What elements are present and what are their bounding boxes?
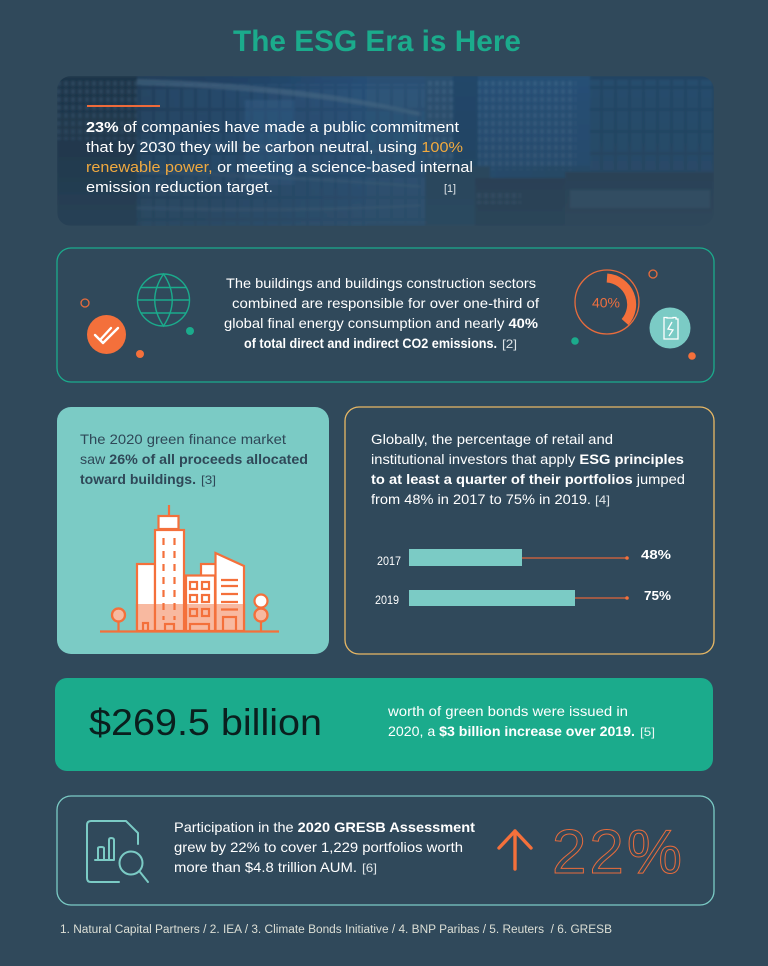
text block: commitment statement: renewable power, or meeting a science-based internal (86, 159, 473, 176)
panel: GRESB assessment (57, 796, 714, 905)
text block: investors statement: Globally, the percentage of retail and (371, 431, 613, 447)
text block: investors statement: [4] (595, 493, 610, 507)
bar: 2019: 2019 (375, 595, 399, 607)
text block: energy statement: of total direct and indirect CO2 emissions. (244, 335, 497, 351)
text block: GRESB statement: Participation in the 2020 GRESB Assessment (174, 819, 475, 835)
title: The ESG Era is Here (233, 25, 521, 58)
lower tint band (110, 604, 269, 630)
big number: $269.5 billion (89, 702, 322, 743)
text block: bonds statement (387, 703, 655, 739)
panel: ESG investors (345, 407, 714, 654)
text block: proceeds statement: toward buildings. (80, 471, 196, 487)
panel: green finance market (57, 407, 329, 654)
text block: investors statement (371, 431, 685, 507)
icon: battery (650, 308, 690, 348)
decorative dots left (81, 299, 194, 358)
text block: commitment statement: emission reduction target. (86, 179, 273, 196)
text block: bonds statement: 2020, a $3 billion increase over 2019. (388, 723, 635, 739)
bar: 2019: 75% (644, 588, 671, 603)
text block: investors statement: from 48% in 2017 to 75% in 2019. (371, 491, 591, 507)
donut chart: 40%: 40% (592, 294, 620, 310)
footer: sources: 1. Natural Capital Partners / 2. IEA / 3. Climate Bonds Initiative / 4. BNP Paribas / 5. Reuters / 6. GRESB (60, 924, 612, 936)
bar: 2019 (375, 588, 671, 607)
text block: bonds statement: [5] (640, 725, 655, 739)
text block: investors statement: institutional investors that apply ESG principles (371, 451, 684, 467)
icon: check badge (87, 315, 126, 354)
text block: energy statement: global final energy consumption and nearly 40% (224, 315, 539, 331)
text block: proceeds statement: [3] (201, 473, 216, 487)
bar: 2017: 48% (641, 547, 671, 562)
text block: proceeds statement: saw 26% of all proceeds allocated (80, 451, 308, 467)
icon: city buildings (100, 505, 279, 632)
decorative dots right (571, 270, 696, 360)
panel: buildings energy share (57, 248, 714, 382)
accent rule (87, 105, 160, 107)
text block: proceeds statement (80, 431, 308, 487)
bar: 2017: 2017 (377, 556, 401, 568)
icon: up arrow (499, 831, 531, 869)
bar: 2017 (377, 547, 671, 568)
text block: energy statement: The buildings and buildings construction sectors (226, 275, 536, 291)
text block: commitment statement: that by 2030 they will be carbon neutral, using 100% (86, 139, 463, 156)
text block: commitment statement: 23% of companies have made a public commitment (86, 119, 460, 136)
panel: carbon commitment with city photo (57, 76, 714, 226)
text block: proceeds statement: The 2020 green finance market (80, 431, 286, 447)
donut chart: 40% (575, 270, 639, 334)
text block: energy statement: combined are responsible for over one-third of (232, 295, 539, 311)
text block: GRESB statement: more than $4.8 trillion AUM. (174, 859, 357, 875)
text block: bonds statement: worth of green bonds were issued in (387, 703, 628, 719)
text block: commitment statement: [1] (444, 183, 456, 195)
big outlined number: 22% (552, 818, 682, 887)
bar chart: 2017 vs 2019 (375, 547, 671, 607)
text block: energy statement: [2] (502, 337, 517, 351)
photo: city buildings (57, 76, 714, 226)
text block: GRESB statement (174, 819, 475, 875)
text block: commitment statement (86, 119, 473, 196)
text block: GRESB statement: [6] (362, 861, 377, 875)
text block: investors statement: to at least a quarter of their portfolios jumped (371, 471, 685, 487)
text block: energy statement (224, 275, 539, 351)
text block: GRESB statement: grew by 22% to cover 1,229 portfolios worth (174, 839, 463, 855)
icon: globe (138, 274, 190, 326)
icon: document with chart and magnifier (87, 821, 148, 882)
panel: green bonds (55, 678, 713, 771)
